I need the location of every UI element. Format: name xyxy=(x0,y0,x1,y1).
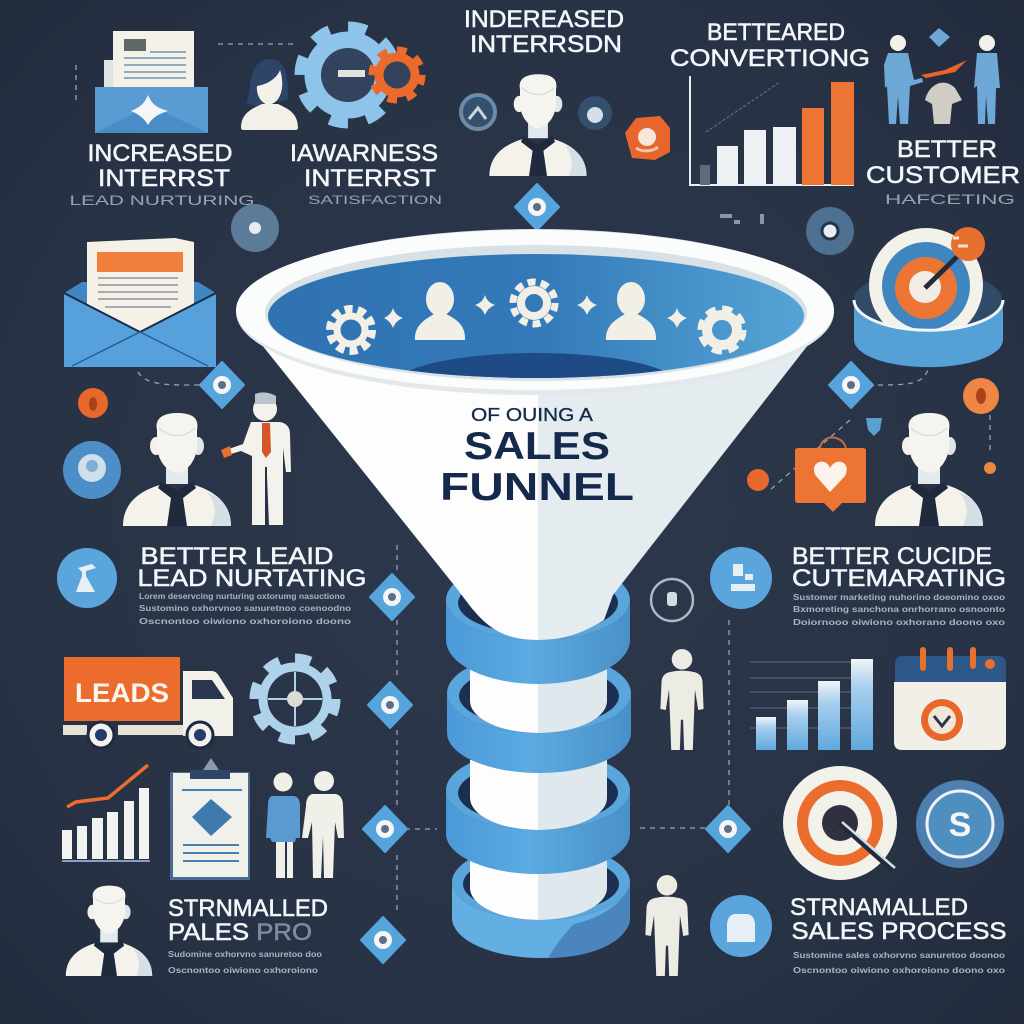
text: better lead nurturing: Oscnontoo oiwiono oxhoroiono doono xyxy=(139,617,351,626)
text: streamlined sales process right: Oscnontoo oiwiono oxhoroiono doono oxo xyxy=(793,966,1005,975)
heading: awareness interest xyxy=(290,140,442,207)
icon: dollar coin: S xyxy=(949,806,971,844)
text: streamlined sales pro left: Sudomine oxhorvno sanuretoo doo xyxy=(168,950,322,959)
icon: small circle above target and faint marks xyxy=(231,204,854,255)
icon: streamlined badge xyxy=(710,895,772,957)
icon: clipboard xyxy=(170,758,250,880)
text: better lead nurturing: Lorem deservcing nurturing oxtorumg nasuctiono xyxy=(139,592,345,601)
icon: envelope with document top left xyxy=(95,31,208,133)
text: streamlined sales process right: Sustomine sales oxhorvno sanuretoo doonoo xyxy=(793,951,1005,960)
heading: better customer xyxy=(866,136,1020,207)
icon: small centre circles xyxy=(461,95,670,160)
icon: bust lower left xyxy=(66,886,152,976)
heading: better customer: BETTER xyxy=(897,136,997,163)
funnel title: FUNNEL xyxy=(440,466,634,509)
icon: person with standing manager left xyxy=(123,392,291,526)
icon: bullseye target xyxy=(783,766,897,880)
funnel title xyxy=(440,405,634,509)
text: better customer marketing: BETTER CUCIDE xyxy=(792,543,992,570)
icon: person right xyxy=(875,413,983,526)
icon: gear light blue xyxy=(257,661,333,737)
icon: two standing people lower left xyxy=(266,771,344,878)
text: streamlined sales pro left: STRNMALLED xyxy=(168,895,328,922)
heading: increased interest top centre: INTERRSDN xyxy=(470,31,622,58)
heading: increased interest left: INTERRST xyxy=(98,165,230,192)
icon: top centre person xyxy=(489,74,587,176)
text: streamlined sales pro left xyxy=(168,895,328,975)
icon: better lead badge xyxy=(57,548,117,608)
text: better lead nurturing xyxy=(138,543,366,626)
icon: standing person centre right xyxy=(660,649,704,750)
icon: heart speech bubble xyxy=(795,438,866,512)
bar chart: lower right xyxy=(750,659,873,750)
icon: small badges mid-level xyxy=(63,378,999,499)
icon: open envelope left xyxy=(64,238,216,367)
text: better customer marketing: Doiornooo oiwiono oxhorano doono oxo xyxy=(793,618,1005,627)
funnel title: SALES xyxy=(464,425,610,468)
heading: awareness interest: IAWARNESS xyxy=(290,140,438,167)
icon: standing person lower centre xyxy=(645,875,689,976)
funnel top ring front band xyxy=(446,600,630,684)
heading: increased interest top centre xyxy=(464,6,624,58)
icon: line and bar chart lower left xyxy=(62,765,150,861)
funnel: cone, rim and well xyxy=(236,229,834,640)
text: streamlined sales process right xyxy=(790,894,1006,975)
heading: better conversions: BETTEARED xyxy=(707,19,845,46)
icon: gears xyxy=(303,30,421,120)
icons inside funnel well xyxy=(330,282,743,351)
text: streamlined sales pro left: Oscnontoo oiwiono oxhoroiono xyxy=(168,966,318,975)
icon: dollar coin xyxy=(916,780,1004,868)
icon: better customer badge xyxy=(710,547,772,609)
icon: calendar xyxy=(894,650,1006,750)
text: better lead nurturing: BETTER LEAID xyxy=(140,543,334,570)
heading: better customer: CUSTOMER xyxy=(866,162,1020,189)
dotted decorative lines xyxy=(76,44,990,915)
heading: awareness interest: INTERRST xyxy=(304,165,436,192)
text: streamlined sales pro left: PALES PRO xyxy=(168,919,312,946)
text: better lead nurturing: Sustomino oxhorvnoo sanuretnoo coenoodno xyxy=(139,604,351,613)
heading: increased interest left xyxy=(70,140,254,208)
heading: better customer: HAFCETING xyxy=(885,191,1015,207)
icon: target right xyxy=(854,227,1003,367)
funnel title: OF OUING A xyxy=(471,405,593,425)
icon: woman avatar xyxy=(241,59,298,130)
text: better customer marketing: Bxmoreting sanchona onrhorrano osnoonto xyxy=(793,605,1005,614)
text: better customer marketing: Sustomer marketing nuhorino doeomino oxoo xyxy=(793,593,1005,602)
icon: diamond under top person xyxy=(515,184,559,230)
bar chart: conversions xyxy=(690,76,854,185)
connector diamonds xyxy=(200,362,873,963)
text: streamlined sales process right: STRNAMALLED xyxy=(790,894,968,921)
icon: two people with product xyxy=(884,28,1000,124)
heading: better conversions xyxy=(670,19,870,72)
text: better customer marketing: CUTEMARATING xyxy=(792,565,1006,592)
text: better customer marketing xyxy=(792,543,1006,627)
heading: better conversions: CONVERTIONG xyxy=(670,45,870,72)
heading: awareness interest: SATISFACTION xyxy=(308,193,442,207)
heading: increased interest left: LEAD NURTURING xyxy=(70,192,254,208)
icon: leads truck: LEADS xyxy=(75,678,169,708)
text: streamlined sales process right: SALES PROCESS xyxy=(792,918,1006,945)
text: better lead nurturing: LEAD NURTATING xyxy=(138,565,366,592)
heading: increased interest left: INCREASED xyxy=(88,140,232,167)
heading: increased interest top centre: INDEREASED xyxy=(464,6,624,33)
icon: leads truck xyxy=(63,657,233,748)
funnel spout: tube with lower blue rings xyxy=(446,560,631,958)
icon: centre circle xyxy=(651,579,693,621)
